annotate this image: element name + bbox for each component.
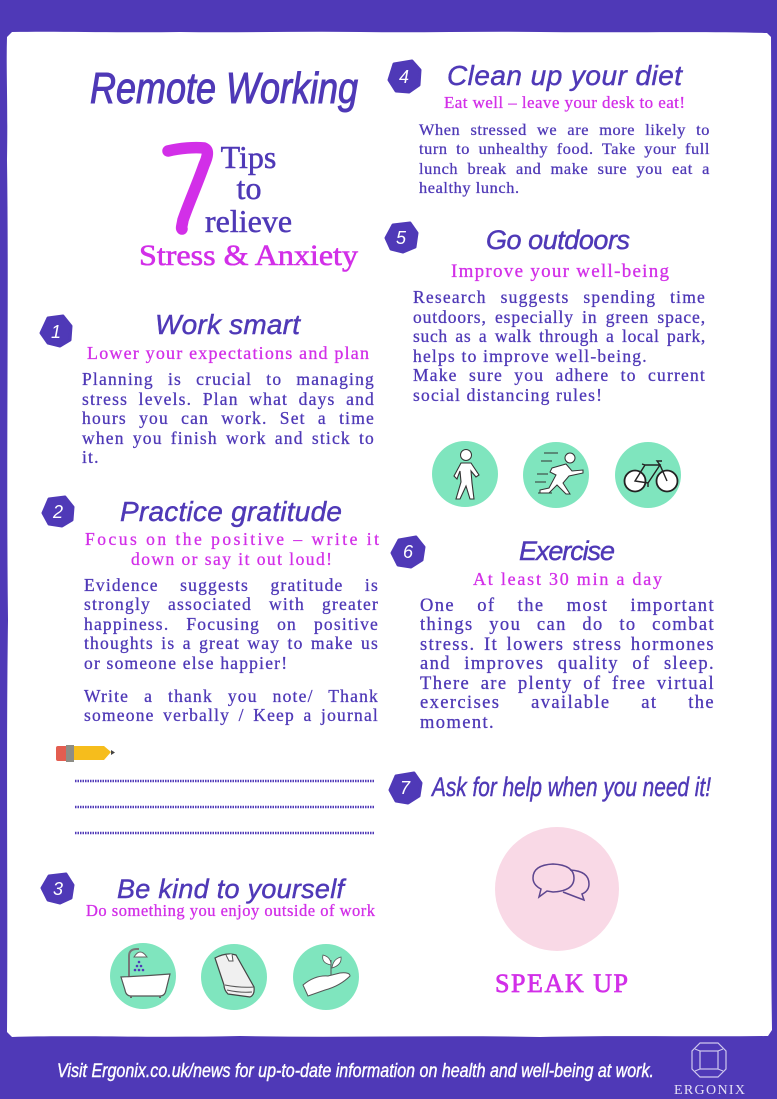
body text: happiness. Focusing on positive [84,614,379,634]
body text [413,287,706,406]
subheading [85,529,379,569]
body text: or someone else happier! [84,653,288,673]
body text: such as a walk through a local park, [413,326,706,346]
panel: tip 2 practice gratitude [42,496,380,726]
panel: tip 3 be kind to yourself [40,872,376,1010]
subheading: Lower your expectations and plan [87,343,369,363]
icon: bath [110,943,176,1009]
body text: There are plenty of free virtual [420,674,715,694]
badge 3: 3 [53,879,63,899]
badge 1 [41,316,71,346]
badge 3 [42,874,73,903]
subheading: Eat well – leave your desk to eat! [444,93,685,112]
heading: Clean up your diet: Clean up your diet [447,60,683,91]
heading: Practice gratitude: Practice gratitude [120,496,342,527]
body text: things you can do to combat [420,615,715,635]
body text: thoughts is a great way to make us [84,633,379,653]
panel: tip 5 go outdoors [384,222,706,508]
subtitle: Tips to relieve: Tips [221,139,276,175]
badge 2 [43,497,73,526]
body text: exercises available at the [420,693,715,713]
body text: actions: someone verbally / Keep a journal [84,705,379,725]
body text: when you finish work and stick to [82,428,375,448]
pink circle [495,827,619,951]
body text: Make sure you adhere to current [413,365,706,385]
body text: it. [82,447,100,467]
big number 7 [168,148,207,229]
badge 6 [392,537,424,567]
badge 6: 6 [403,542,414,562]
badge 7: 7 [400,778,411,798]
badge 1: 1 [51,322,61,342]
body text: stress. It lowers stress hormones [420,635,715,655]
title block [90,64,358,272]
icons: walking, running, cycling [432,441,681,508]
icon: bicycle [615,442,681,508]
icon: hand with plant [293,944,359,1010]
subheading: At least 30 min a day [473,569,662,589]
body text: When stressed we are more likely to [419,120,710,138]
body text: Evidence suggests gratitude is [84,574,379,594]
body text: healthy lunch. [419,178,520,197]
logo: Ergonix [674,1043,745,1098]
subheading: Do something you enjoy outside of work [86,901,376,920]
panel: tip 1 work smart [40,309,375,467]
label: SPEAK UP: SPEAK UP [495,969,628,998]
panel: writing lines [56,745,374,834]
subtitle: Tips to relieve [205,139,292,239]
subheading: Improve your well-being [451,261,670,282]
body text: and improves quality of sleep. [420,654,715,674]
body text: moment. [420,713,495,733]
heading: Be kind to yourself: Be kind to yourself [117,874,346,904]
icon: running person [523,442,589,508]
body text: turn to unhealthy food. Take your full [419,139,710,158]
footer text: Visit Ergonix.co.uk/news for up-to-date information on health and well-being at work. [57,1061,654,1082]
icon: speech bubbles [533,864,589,900]
badge 5 [386,223,417,252]
icon: pencil [56,745,115,762]
subheading: down or say it out loud! [131,549,332,569]
subtitle: Stress and Anxiety: Stress & Anxiety [139,239,358,272]
logo: Ergonix: ERGONIX [674,1083,745,1098]
body text: actions: Write a thank you note/ Thank [84,686,379,706]
title: Remote Working: Remote Working [90,64,358,113]
body text: stress levels. Plan what days and [82,389,375,409]
badge 7 [390,773,421,803]
icon: walking person [432,441,498,507]
body text: strongly associated with greater [84,594,379,614]
heading: Go outdoors: Go outdoors [486,225,630,255]
body text [420,596,715,733]
body text: actions [84,686,379,726]
body text [418,120,710,197]
panel: tip 4 clean up your diet [388,60,710,197]
icon: towel [201,944,267,1010]
body text: Research suggests spending time [413,287,706,307]
badge 5: 5 [396,228,407,248]
dotted lines [75,781,375,833]
badge 4 [389,61,420,92]
heading: Work smart: Work smart [155,309,301,340]
body text [82,369,375,467]
footer [57,1042,745,1098]
subtitle: Tips to relieve: to [237,170,261,206]
body text: outdoors, especially in green space, [413,307,706,327]
heading: Exercise: Exercise [519,536,615,566]
panel: tip 7 ask for help [388,772,711,998]
body text [84,574,379,674]
subheading: Focus on the positive – write it [85,529,379,549]
panel: tip 6 exercise [390,536,715,733]
body text: hours you can work. Set a time [82,408,375,428]
body text: One of the most important [420,596,715,616]
body text: helps to improve well-being. [413,346,648,366]
body text: social distancing rules! [413,385,603,405]
badge 2: 2 [52,502,63,522]
body text: Planning is crucial to managing [82,369,375,389]
subtitle: Tips to relieve: relieve [205,203,292,239]
badge 4: 4 [399,67,409,87]
body text: lunch break and make sure you eat a [419,159,710,178]
